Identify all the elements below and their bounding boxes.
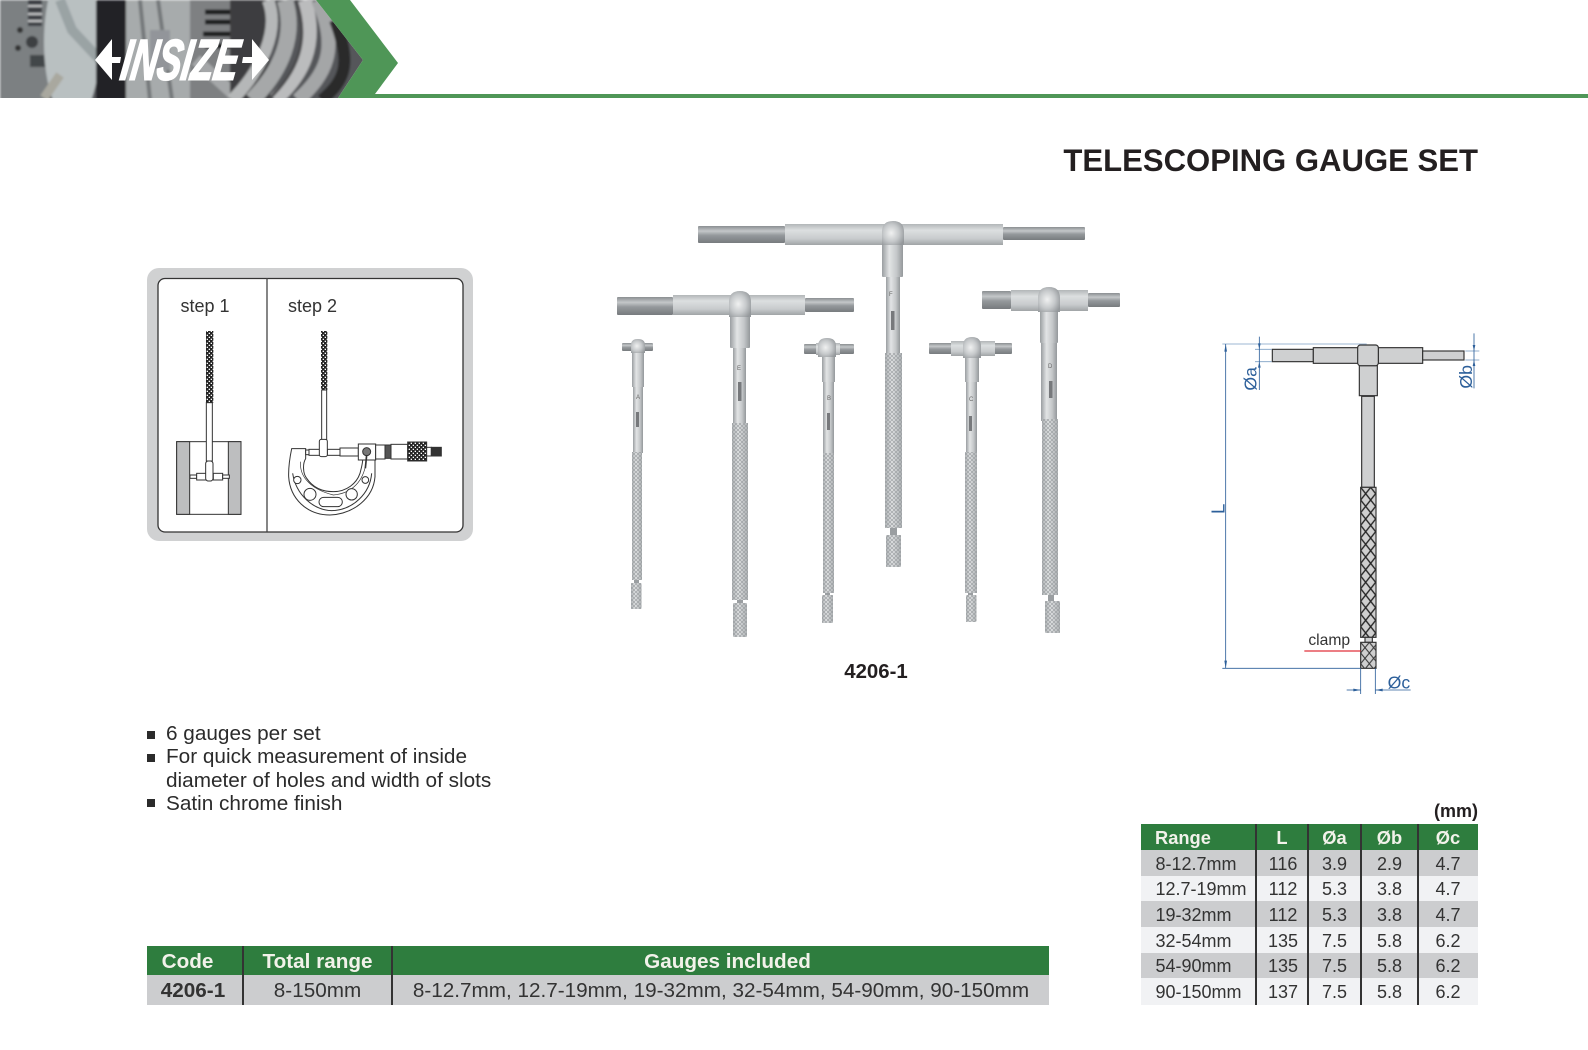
product code caption: 4206-1 — [844, 661, 908, 683]
INSIZE logo: INSIZE — [117, 29, 245, 92]
specification table: 54-90mm — [1156, 956, 1232, 976]
gauge E: E — [737, 366, 741, 372]
specification table: 32-54mm — [1156, 930, 1232, 950]
clamp callout: clamp — [1308, 632, 1350, 649]
step 1: step 1 — [180, 296, 230, 316]
gauge D: D — [1048, 364, 1053, 370]
specification table: 5.8 — [1377, 956, 1402, 976]
step 2: step 2 — [288, 296, 337, 316]
unit label: (mm) — [1434, 801, 1478, 821]
table header: Øb — [1377, 827, 1402, 848]
technical drawing with dimensions — [1207, 333, 1480, 694]
dimension labels: Øb — [1456, 365, 1476, 389]
product photo: six telescoping gauges — [617, 221, 1120, 637]
feature bullet list: For quick measurement of inside — [166, 745, 467, 768]
table header: Range — [1155, 827, 1211, 848]
table header: Øc — [1436, 827, 1460, 848]
code table header: Code — [162, 950, 213, 972]
table header: L — [1276, 827, 1288, 848]
title: TELESCOPING GAUGE SET — [1063, 143, 1478, 178]
specification table: 5.8 — [1377, 930, 1402, 950]
gauge F, largest: F — [889, 292, 893, 298]
specification table — [1141, 824, 1478, 1005]
specification table: 5.3 — [1322, 879, 1347, 899]
gauge outline — [1272, 345, 1464, 668]
specification table: 6.2 — [1435, 982, 1461, 1002]
step 1 — [177, 296, 241, 514]
feature bullet list: 6 gauges per set — [166, 722, 321, 745]
gauge B — [804, 338, 854, 623]
gauge A, smallest — [622, 339, 653, 609]
product code table: 4206-1 — [161, 979, 225, 1002]
specification table: 112 — [1269, 904, 1297, 924]
specification table: 4.7 — [1435, 854, 1461, 874]
gauge F, largest — [698, 221, 1085, 567]
specification table: 6.2 — [1435, 930, 1461, 950]
table header: Øa — [1322, 827, 1347, 848]
specification table: 19-32mm — [1156, 904, 1232, 924]
gauge A, smallest: A — [636, 395, 640, 401]
clamp callout — [1304, 632, 1361, 651]
feature bullet list — [147, 722, 491, 815]
specification table: 4.7 — [1435, 904, 1461, 924]
dimension lines — [1222, 333, 1479, 694]
header banner — [0, 0, 1588, 98]
specification table: 5.3 — [1322, 904, 1347, 924]
feature bullet list: diameter of holes and width of slots — [166, 768, 491, 792]
specification table: 3.8 — [1377, 904, 1402, 924]
specification table: 7.5 — [1322, 982, 1347, 1002]
gauge C: C — [969, 397, 974, 403]
product code table — [147, 946, 1049, 1005]
gauge E — [617, 291, 854, 637]
specification table: 135 — [1268, 930, 1298, 950]
green chevron and rule — [316, 0, 1588, 98]
specification table: 7.5 — [1322, 956, 1347, 976]
specification table: 2.9 — [1377, 854, 1402, 874]
specification table: 90-150mm — [1156, 982, 1242, 1002]
feature bullet list: Satin chrome finish — [166, 792, 342, 815]
dimension labels: Øa — [1241, 367, 1261, 391]
product code table: 8-12.7mm, 12.7-19mm, 19-32mm, 32-54mm, 54-90mm, 90-150mm — [413, 979, 1029, 1002]
gauge B: B — [827, 396, 831, 402]
specification table: 7.5 — [1322, 930, 1347, 950]
table header — [1141, 824, 1478, 850]
step 2 — [288, 296, 441, 515]
gauge D — [982, 287, 1120, 633]
dimension labels: Øc — [1388, 672, 1410, 692]
specification table: 135 — [1268, 956, 1298, 976]
specification table: 12.7-19mm — [1156, 879, 1247, 899]
specification table: 3.9 — [1322, 854, 1347, 874]
specification table: 6.2 — [1435, 956, 1461, 976]
code table header — [147, 946, 1049, 975]
specification table: 8-12.7mm — [1156, 854, 1237, 874]
specification table: 137 — [1268, 982, 1298, 1002]
code table header: Gauges included — [644, 950, 811, 972]
specification table: 4.7 — [1435, 879, 1461, 899]
panel: usage steps — [147, 268, 473, 541]
dimension labels: L — [1207, 504, 1228, 514]
specification table: 5.8 — [1377, 982, 1402, 1002]
header machinery photo — [0, 0, 363, 98]
product code table: 8-150mm — [274, 979, 361, 1002]
gauge C — [929, 337, 1012, 622]
dimension labels — [1207, 365, 1476, 692]
specification table: 3.8 — [1377, 879, 1402, 899]
code table header: Total range — [263, 950, 372, 972]
specification table: 112 — [1269, 879, 1297, 899]
specification table: 116 — [1269, 854, 1297, 874]
